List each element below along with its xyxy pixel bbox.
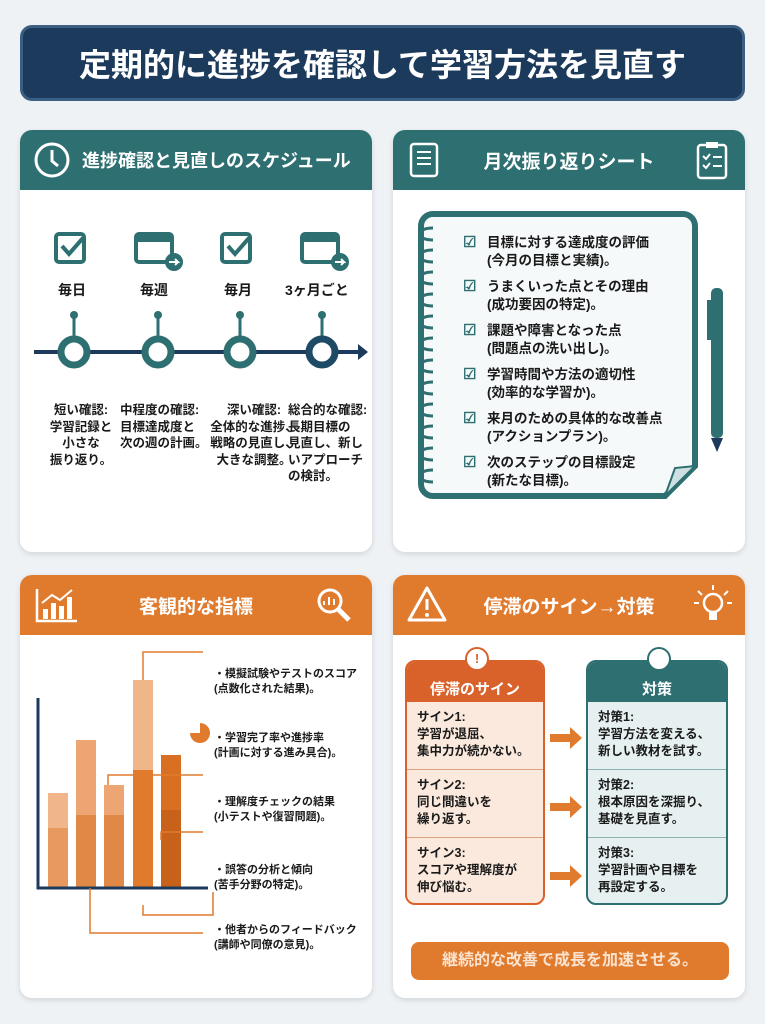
heading: objective indicators [20,575,372,635]
icon: countermeasure badge [647,647,671,671]
panel: objective indicators [20,575,372,998]
labels: frequencies: 毎日 [58,282,86,298]
indicator list: ・他者からのフィードバック [214,924,357,936]
column: signs: サイン1: [417,710,466,724]
text: descriptions: 小さな [62,436,100,450]
column: signs: 停滞のサイン [430,681,520,698]
column: signs: 伸び悩む。 [417,880,480,894]
checklist: ☑ [463,322,476,339]
column: countermeasures: 学習方法を変える、 [598,727,710,741]
checklist: うまくいった点とその理由 [487,279,649,294]
text: descriptions: いアプローチ [288,452,363,466]
callout: continuous improvement: 継続的な改善で成長を加速させる。 [442,952,698,969]
icon: warning badge: ! [475,651,479,666]
column: countermeasures [586,660,728,905]
panel: stagnation signs and countermeasures [393,575,745,998]
text: descriptions: の検討。 [288,469,338,483]
icon: warning badge [465,647,489,671]
heading: schedule: 進捗確認と見直しのスケジュール [82,151,351,171]
text: descriptions: 戦略の見直し、 [210,436,298,450]
indicator list: (計画に対する進み具合)。 [214,747,342,759]
column: countermeasures: 新しい教材を試す。 [598,744,709,758]
text: descriptions: 目標達成度と [120,420,195,434]
text: descriptions [50,403,367,483]
text: descriptions: 学習記録と [50,420,112,434]
text: descriptions: 見直し、新し [288,436,363,450]
icon: pen [707,288,723,452]
indicator list: (苦手分野の特定)。 [214,879,309,891]
callout: continuous improvement [411,942,729,980]
column: signs: サイン3: [417,846,466,860]
heading: objective indicators: 客観的な指標 [139,596,253,618]
checklist: (問題点の洗い出し)。 [487,341,618,356]
heading: schedule [20,130,372,190]
text: descriptions: 短い確認: [54,403,108,417]
checklist: 来月のための具体的な改善点 [487,411,662,426]
column: countermeasures: 再設定する。 [598,880,673,894]
column: countermeasures: 学習計画や目標を [598,863,698,877]
column: countermeasures: 基礎を見直す。 [598,812,684,826]
column: signs: 学習が退屈、 [417,727,492,741]
title banner: 定期的に進捗を確認して学習方法を見直す [79,47,686,83]
checklist: ☑ [463,234,476,251]
indicator list: ・模擬試験やテストのスコア [214,668,357,680]
title banner [20,25,745,101]
checklist: (アクションプラン)。 [487,429,616,444]
panel: schedule [20,130,372,552]
checklist: ☑ [463,278,476,295]
heading: signs -> countermeasures: 停滞のサイン→対策 [483,596,654,618]
indicator list [214,668,357,951]
column: countermeasures: 根本原因を深掘り、 [598,795,710,809]
text: descriptions: 全体的な進捗、 [210,420,298,434]
indicator list: (小テストや復習問題)。 [214,811,331,823]
text: descriptions: 次の週の計画。 [120,436,208,450]
column: signs: 集中力が続かない。 [417,744,530,758]
indicator list: ・誤答の分析と傾向 [214,864,313,876]
labels: frequencies: 毎月 [224,282,252,298]
labels: frequencies: 毎週 [140,282,168,298]
heading: monthly sheet [393,130,745,190]
arrows [550,727,582,887]
column: signs [405,660,545,905]
text: descriptions: 大きな調整。 [216,452,292,466]
column: signs: スコアや理解度が [417,863,517,877]
panel: monthly review sheet [393,130,745,552]
heading: monthly sheet: 月次振り返りシート [483,152,654,172]
text: descriptions: 深い確認: [227,403,281,417]
indicator list: ・理解度チェックの結果 [214,796,335,808]
checklist: 次のステップの目標設定 [487,455,636,470]
column: signs: 繰り返す。 [417,812,478,826]
bar chart [36,651,214,934]
text: descriptions: 振り返り。 [50,452,112,466]
column: signs: 同じ間違いを [417,795,492,809]
checklist [463,234,662,488]
column: countermeasures: 対策3: [598,846,634,860]
text: descriptions: 長期目標の [288,420,351,434]
text: descriptions: 総合的な確認: [288,403,367,417]
indicator list: ・学習完了率や進捗率 [214,732,324,744]
column: countermeasures: 対策2: [598,778,634,792]
labels: frequencies [58,282,349,298]
checklist: ☑ [463,366,476,383]
checklist: 学習時間や方法の適切性 [487,367,636,382]
text: descriptions: 中程度の確認: [120,403,199,417]
checklist: (効率的な学習か)。 [487,385,604,400]
timeline [34,232,368,368]
column: signs: サイン2: [417,778,466,792]
checklist: 目標に対する達成度の評価 [487,235,649,250]
indicator list: (講師や同僚の意見)。 [214,939,320,951]
checklist: (新たな目標)。 [487,473,577,488]
checklist: ☑ [463,454,476,471]
checklist: 課題や障害となった点 [487,323,622,338]
checklist: ☑ [463,410,476,427]
checklist: (今月の目標と実績)。 [487,253,618,268]
heading: signs -> countermeasures [393,575,745,635]
notebook [418,211,723,499]
column: countermeasures: 対策 [642,681,672,698]
labels: frequencies: 3ヶ月ごと [285,282,349,298]
column: countermeasures: 対策1: [598,710,634,724]
indicator list: (点数化された結果)。 [214,683,320,695]
checklist: (成功要因の特定)。 [487,297,604,312]
